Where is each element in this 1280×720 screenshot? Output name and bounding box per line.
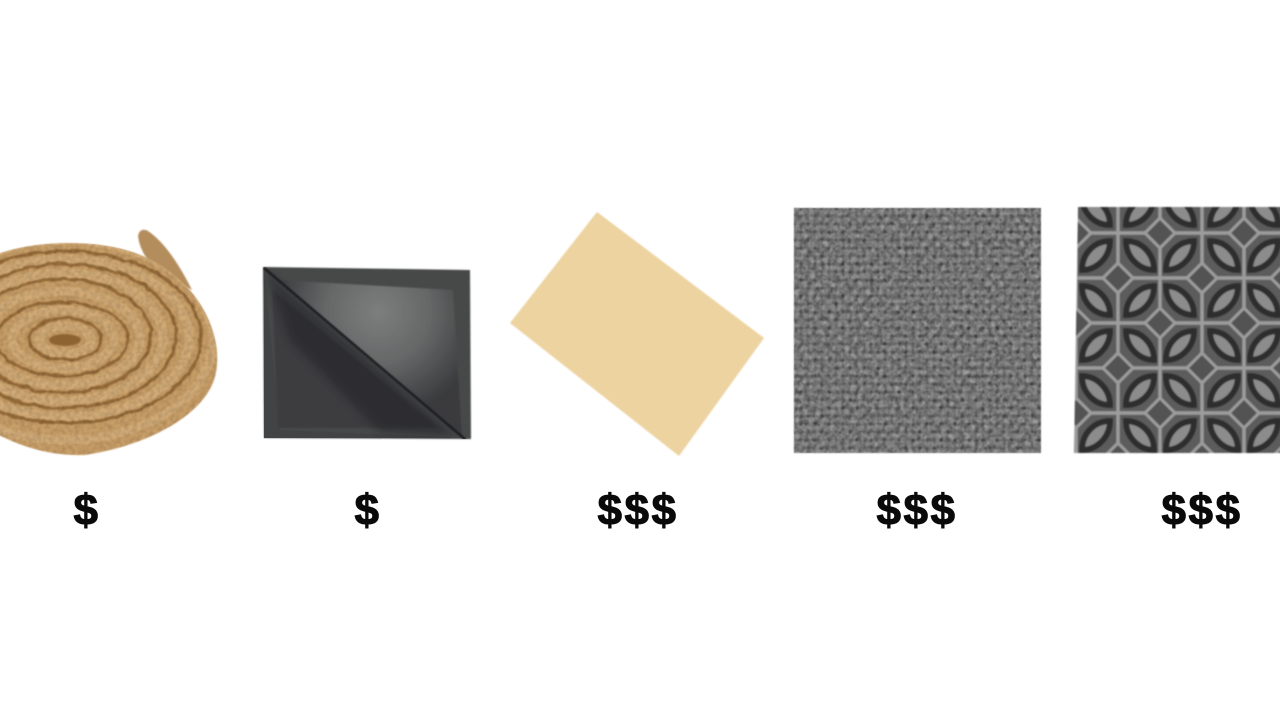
price label: gray geometric patterned mat: $$$ bbox=[1162, 486, 1242, 535]
icon: cork rope coil bbox=[0, 230, 217, 455]
icon: beige foam sheet bbox=[510, 212, 764, 456]
icon: black rubber sheet with folded corner bbox=[263, 267, 471, 440]
icon: gray knitted mat bbox=[794, 208, 1041, 453]
icon: gray geometric patterned mat bbox=[1074, 207, 1280, 453]
price label: black rubber sheet: $ bbox=[355, 486, 381, 535]
price label: beige foam sheet: $$$ bbox=[598, 486, 678, 535]
price label: cork rope coil: $ bbox=[74, 486, 100, 535]
price label: gray knitted mat: $$$ bbox=[877, 486, 957, 535]
material price comparison row bbox=[0, 206, 1280, 528]
